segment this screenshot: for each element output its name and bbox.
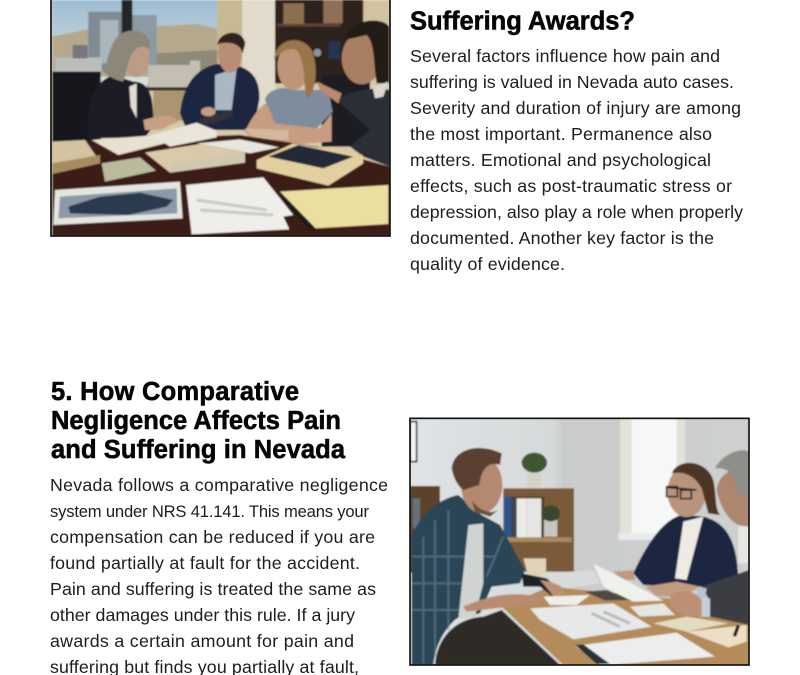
- text block: section 5 body: system under NRS 41.141. This means your: [50, 502, 369, 521]
- text block: section 4 body: effects, such as post-traumatic stress or: [410, 176, 732, 196]
- man with dark sweater: [337, 89, 390, 167]
- text block: section 4 body: documented. Another key factor is the: [410, 228, 714, 248]
- pants behind table: [435, 610, 560, 665]
- panel: section 5 text: [50, 378, 388, 675]
- text block: section 5 body: Pain and suffering is treated the same as: [50, 579, 376, 599]
- man in suit: [180, 64, 259, 130]
- text block: section 4 body: [410, 46, 743, 274]
- text block: section 4 body: Several factors influence how pain and: [410, 46, 720, 66]
- papers: [548, 570, 600, 588]
- man in plaid: [412, 495, 525, 665]
- woman in navy: [633, 515, 738, 587]
- heading: suffering awards: Suffering Awards?: [410, 8, 635, 36]
- text block: section 4 body: matters. Emotional and psychological: [410, 150, 711, 170]
- text block: section 5 body: [50, 475, 388, 675]
- text block: section 5 body: other damages under this rule. If a jury: [50, 605, 355, 625]
- panel: section 4 text: [410, 8, 743, 274]
- text block: section 5 body: compensation can be reduced if you are: [50, 527, 375, 547]
- text block: section 4 body: the most important. Permanence also: [410, 124, 712, 144]
- woman with wrapped arm: [265, 88, 333, 128]
- text block: section 5 body: found partially at fault for the accident.: [50, 553, 360, 573]
- heading: comparative negligence: Negligence Affects Pain: [51, 407, 341, 435]
- heading: comparative negligence: 5. How Comparative: [51, 378, 299, 406]
- text block: section 4 body: depression, also play a role when properly: [410, 202, 743, 222]
- text block: section 5 body: Nevada follows a comparative negligence: [50, 475, 388, 495]
- text block: section 4 body: quality of evidence.: [410, 254, 565, 274]
- text block: section 5 body: awards a certain amount for pain and: [50, 631, 354, 651]
- heading: comparative negligence: [51, 378, 346, 464]
- table: [502, 587, 749, 665]
- text block: section 4 body: Severity and duration of injury are among: [410, 98, 741, 118]
- photo: client reviewing documents with two attorneys: [410, 418, 750, 665]
- text block: section 4 body: suffering is valued in Nevada auto cases.: [410, 72, 734, 92]
- heading: comparative negligence: and Suffering in Nevada: [51, 436, 346, 464]
- gray-haired woman: [87, 75, 153, 138]
- photo: attorneys meeting with injured client at conference table: [51, 0, 390, 236]
- table: [52, 135, 390, 236]
- man right: [702, 570, 749, 625]
